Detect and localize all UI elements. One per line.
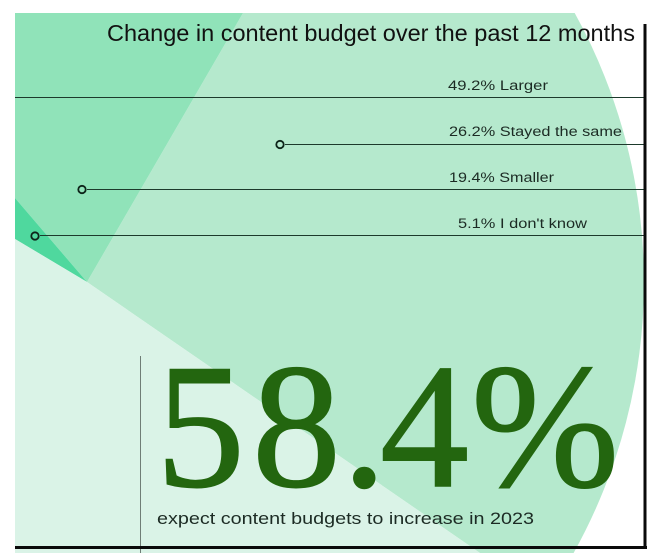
leader line with marker: I don't know (31, 232, 645, 240)
frame: bottom rule (15, 546, 647, 549)
caption: expect content budgets to increase in 2023 (157, 509, 534, 528)
frame: right rule (644, 24, 646, 549)
title: Change in content budget over the past 12 months (107, 20, 635, 46)
label: Stayed the same: 26.2% Stayed the same (449, 124, 622, 139)
pie slice: 19.4% Smaller (15, 198, 87, 282)
leader line with marker: Smaller (78, 186, 645, 193)
leader line with marker: Stayed the same (276, 141, 645, 148)
label: Larger: 49.2% Larger (448, 78, 549, 93)
big statistic: 58.4% (156, 327, 619, 525)
label: I don't know: 5.1% I don't know (458, 216, 587, 231)
pie slice: 5.1% I don't know (15, 239, 480, 553)
label: Smaller: 19.4% Smaller (449, 170, 555, 185)
pie slice: 26.2% Stayed the same (15, 13, 243, 282)
vertical divider (140, 356, 142, 553)
leader line: Larger (15, 96, 645, 98)
